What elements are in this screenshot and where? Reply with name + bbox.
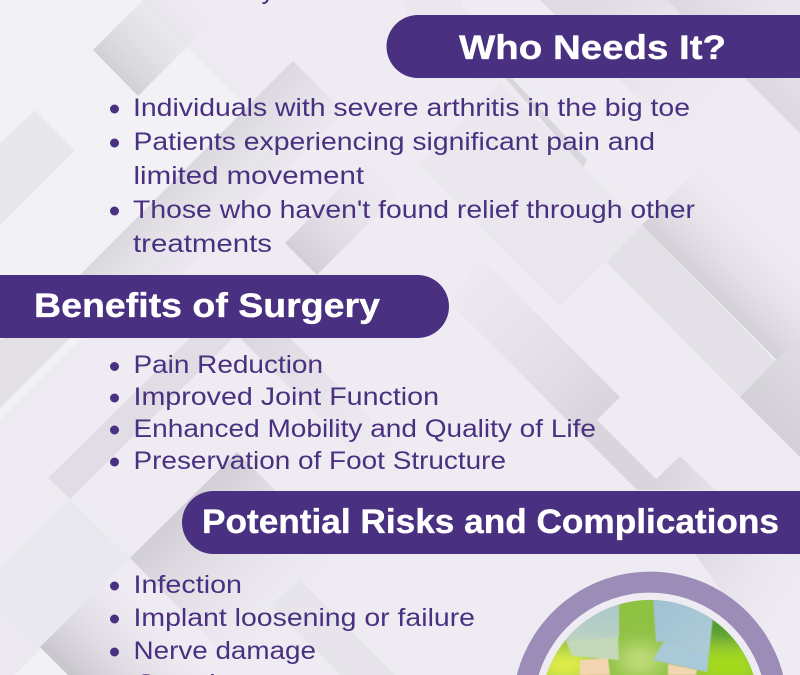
bullet list: who needs it: Patients experiencing significant pain and (134, 129, 655, 156)
section: who needs it (110, 15, 800, 258)
bullet list: who needs it: treatments (133, 231, 272, 258)
bullet list: who needs it: limited movement (134, 163, 364, 190)
bullet list: risks: Implant loosening or failure (134, 605, 475, 632)
heading pill: Benefits of Surgery: Benefits of Surgery (34, 287, 380, 325)
heading pill: Who Needs It? (387, 15, 800, 78)
bullet list: benefits: Pain Reduction (134, 352, 323, 379)
circular photo: feet in rolled jeans (517, 572, 783, 675)
section: potential risks and complications (110, 491, 800, 675)
heading pill: Potential Risks and Complications (182, 491, 800, 554)
photo: jeans and feet over green background (546, 600, 754, 675)
bullet list: risks: Nerve damage (134, 638, 316, 665)
heading pill: Who Needs It?: Who Needs It? (459, 29, 726, 67)
bullet list: who needs it: Those who haven't found relief through other (133, 197, 695, 224)
bullet list: benefits (110, 352, 596, 475)
heading pill: Potential Risks and Complications: Potential Risks and Complications (202, 503, 779, 541)
bullet list: risks (110, 572, 475, 675)
section: benefits of surgery (0, 275, 596, 475)
bullet list: who needs it: Individuals with severe arthritis in the big toe (133, 95, 690, 122)
bullet list: benefits: Enhanced Mobility and Quality of Life (134, 416, 596, 443)
heading pill: Benefits of Surgery (0, 275, 449, 338)
bullet list: benefits: Preservation of Foot Structure (134, 448, 506, 475)
bullet list: risks: Infection (134, 572, 242, 599)
bullet list: benefits: Improved Joint Function (134, 384, 439, 411)
photo ring (517, 572, 783, 675)
bullet list: who needs it (110, 95, 695, 258)
